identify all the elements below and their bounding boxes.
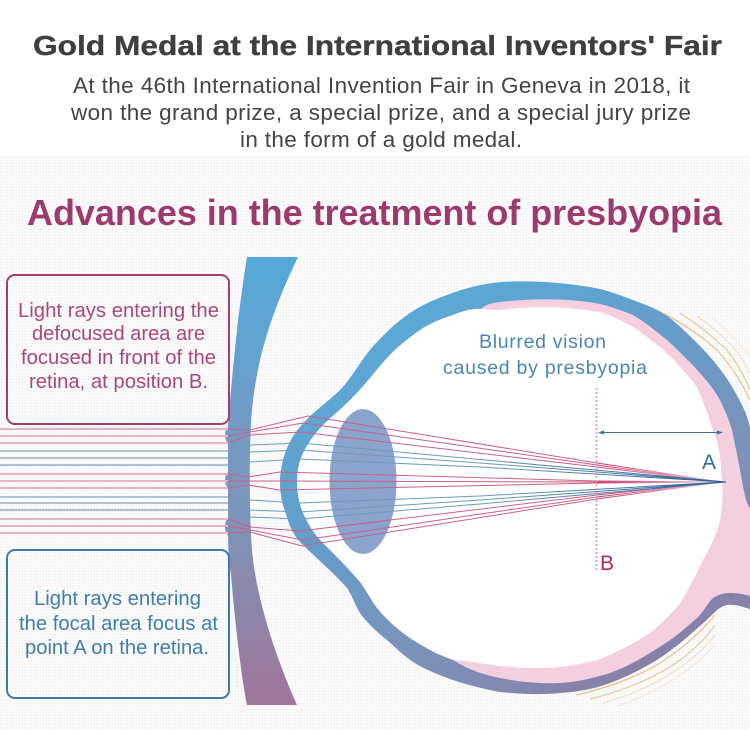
panel: focal area: point A on the retina. bbox=[25, 637, 209, 659]
double arrow bbox=[598, 430, 723, 434]
pink rays fading to point A bbox=[597, 463, 725, 499]
panel: defocused area bbox=[7, 275, 229, 424]
incoming rays: pink bbox=[0, 429, 228, 533]
dotted line at B bbox=[596, 388, 598, 571]
label B: B bbox=[600, 552, 614, 575]
contact lens bbox=[225, 257, 298, 705]
panel: focal area: the focal area focus at bbox=[19, 613, 218, 635]
title: Gold Medal at the International Inventors' Fair bbox=[33, 30, 722, 61]
panel: defocused area: Light rays entering the bbox=[18, 300, 219, 322]
panel: focal area bbox=[7, 550, 229, 698]
eye bbox=[280, 281, 750, 694]
intro text: At the 46th International Invention Fair in Geneva in 2018, it bbox=[73, 73, 691, 98]
blurred vision label: caused by presbyopia bbox=[443, 357, 647, 379]
panel: focal area: Light rays entering bbox=[34, 588, 201, 610]
panel: defocused area: defocused area are bbox=[32, 323, 205, 345]
panel: defocused area: focused in front of the bbox=[21, 347, 216, 369]
eye wall bbox=[280, 281, 750, 694]
gold arcs: bottom right bbox=[576, 615, 715, 706]
heading: Advances in the treatment of presbyopia bbox=[27, 192, 723, 233]
intro text: won the grand prize, a special prize, and a special jury prize bbox=[70, 100, 691, 125]
refracted rays: pink bbox=[228, 416, 597, 546]
refracted rays: blue bbox=[228, 443, 480, 519]
incoming rays: blue bbox=[0, 451, 228, 510]
crystalline lens bbox=[330, 409, 396, 554]
blurred vision label bbox=[443, 331, 647, 379]
pink retina bbox=[453, 299, 750, 683]
blue rays converging to point A bbox=[480, 460, 726, 504]
panel: defocused area: retina, at position B. bbox=[29, 371, 208, 393]
eye interior bbox=[297, 307, 722, 668]
dotted background bbox=[0, 155, 750, 730]
intro text bbox=[70, 73, 691, 152]
blurred vision label: Blurred vision bbox=[479, 331, 606, 353]
gold arcs: top right bbox=[663, 313, 750, 400]
label A: A bbox=[702, 451, 716, 474]
intro text: in the form of a gold medal. bbox=[240, 127, 522, 152]
